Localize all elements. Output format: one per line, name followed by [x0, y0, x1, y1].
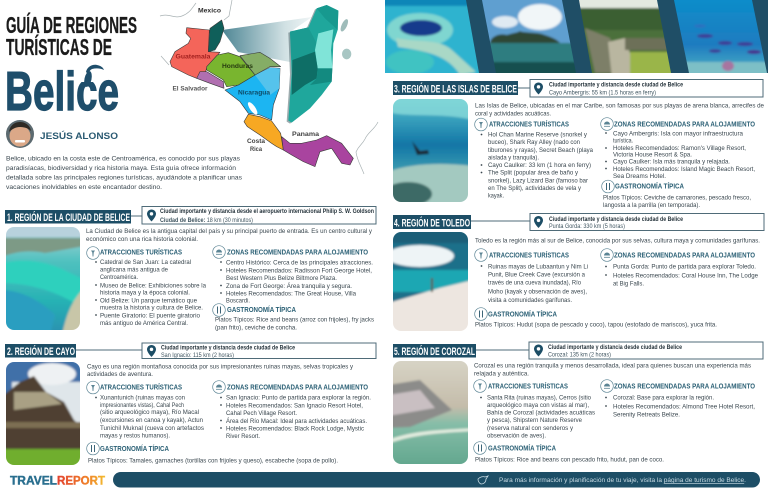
lodging: ZONAS RECOMENDADAS PARA ALOJAMIENTO: [227, 382, 368, 392]
lodging: Hoteles Recomendados: Ramon's Village Resort,: [613, 145, 746, 152]
photo: reef aerial: [6, 227, 80, 330]
attractions: The Split (popular área de baño y: [488, 170, 579, 177]
lodging: at Big Falls.: [613, 281, 644, 288]
attractions: través de una cueva inundada), Río: [488, 280, 581, 287]
intro text: [6, 156, 243, 191]
attractions: kayak.: [488, 193, 504, 200]
attractions: [87, 247, 206, 327]
lodging: Serenity Retreats Belize.: [613, 412, 680, 419]
photo: Xunantunich ruins: [6, 362, 80, 465]
Belize detail map: [287, 5, 351, 124]
footer bar: [113, 472, 760, 488]
title: GUÍA DE REGIONES: [6, 11, 137, 38]
attractions: ATRACCIONES TURÍSTICAS: [100, 248, 182, 256]
panel: region 2: [0, 343, 376, 470]
gastronomy: Platos Típicos: Rice and beans con pescado frito, hudut, pan de coco.: [475, 456, 664, 463]
attractions: Catedral de San Juan: La catedral: [100, 259, 192, 266]
lodging: Cayo Caulker: Isla más tranquila y relajada.: [613, 159, 730, 166]
panel: region 1: [0, 206, 376, 335]
map labels: Honduras: [222, 63, 253, 70]
attractions: snorkel), Lazy Lizard Bar (famoso bar: [488, 177, 589, 184]
distance box: Corozal: 135 km (2 horas): [548, 352, 611, 358]
map labels: Rica: [250, 146, 262, 153]
photo: beach: [393, 232, 468, 331]
lodging: [601, 380, 755, 419]
photo banner: [385, 0, 768, 73]
attractions: buceo), Shark Ray Alley (nado con: [488, 139, 580, 146]
intro: relajada y auténtica.: [474, 371, 529, 378]
attractions: Hol Chan Marine Reserve (snorkel y: [488, 132, 588, 139]
map of Central America: [160, 0, 378, 174]
gastronomy: Platos Típicos: Rice and beans (arroz con frijoles), fry jacks: [215, 317, 375, 324]
distance box: Ciudad importante y distancia desde el aeropuerto internacional Philip S. W. Goldson: [160, 209, 374, 215]
author: JESÚS ALONSO: [40, 130, 118, 141]
section heading: 3. REGIÓN DE LAS ISLAS DE BELICE: [394, 82, 517, 96]
lodging: Boscardi.: [226, 298, 250, 305]
attractions: más antiguo de América Central.: [100, 320, 188, 327]
title: TURÍSTICAS DE: [6, 33, 112, 60]
intro: Corozal es una región tranquila y menos desarrollada, ideal para quienes buscan una experiencia más: [474, 363, 752, 370]
gastronomy: GASTRONOMÍA TÍPICA: [488, 310, 557, 318]
gastronomy: [87, 442, 338, 464]
photo: reef fish: [674, 0, 767, 73]
title: [6, 11, 137, 60]
panel: region 5: [388, 342, 763, 469]
section heading: [393, 215, 471, 230]
lodging: [213, 246, 373, 305]
attractions: Centroamérica.: [100, 274, 138, 281]
photo: Belize island: [482, 0, 576, 73]
attractions: en The Split), actividades de vela y: [488, 185, 582, 192]
gastronomy: GASTRONOMÍA TÍPICA: [100, 444, 169, 453]
gastronomy: Platos Típicos: Hudut (sopa de pescado y coco), tapou (estofado de mariscos), yuca frita.: [475, 322, 717, 329]
cone highlight: [222, 17, 312, 62]
distance box: Ciudad importante y distancia desde ciudad de Belice: [549, 217, 684, 223]
attractions: (reserva natural con senderos y: [487, 425, 574, 432]
lodging: Best Western Plus Belize Biltmore Plaza.: [226, 275, 337, 282]
attractions: Cayo Caulker: 33 km (1 hora en ferry): [488, 162, 591, 169]
intro: económico con una rica historia colonial.: [86, 236, 198, 243]
intro text: vacaciones inolvidables en este encantador destino.: [6, 184, 162, 191]
lodging: Hoteles Recomendados: San Ignacio Resort Hotel,: [226, 402, 363, 409]
gastronomy: langosta a la parrilla (en temporada).: [603, 202, 700, 209]
distance box: [530, 80, 763, 97]
section heading: [5, 344, 76, 358]
lodging: San Ignacio: Punto de partida para explorar la región.: [226, 395, 371, 402]
distance box: [530, 214, 764, 230]
lodging: Centro Histórico: Cerca de las principales atracciones.: [226, 260, 373, 267]
photo: snorkel diver: [393, 99, 468, 202]
lodging: [601, 118, 755, 180]
intro text: detallada sobre las principales regiones turísticas, ayudándote a planificar unas: [6, 174, 243, 182]
logo: Travel Report: TRAVEL: [10, 476, 57, 488]
gastronomy: GASTRONOMÍA TÍPICA: [615, 182, 684, 190]
gastronomy: [602, 180, 751, 209]
intro: coral y actividades acuáticas.: [475, 110, 551, 117]
distance box: Cayo Ambergris: 55 km (1.5 horas en ferry): [549, 90, 656, 96]
map labels: Panama: [292, 131, 319, 138]
gastronomy: Platos Típicos: Tamales, garnaches (tortillas con frijoles y queso), escabeche (sopa de pollo).: [88, 457, 338, 464]
author: [6, 120, 118, 148]
intro: [474, 363, 752, 378]
attractions: observación de aves).: [487, 432, 546, 439]
gastronomy: (pan frito), ceviche de concha.: [215, 325, 297, 332]
distance box: [529, 342, 763, 359]
map labels: [172, 8, 319, 153]
lodging: Zona de Fort George: Área tranquila y segura.: [226, 281, 352, 290]
icon: pointing hand: [478, 476, 488, 484]
attractions: visita a comunidades garífunas.: [488, 297, 572, 304]
lodging: Hoteles Recomendados: The Great House, Villa: [226, 290, 356, 297]
attractions: Punit, Blue Creek Cave (excursión a: [488, 272, 585, 279]
intro: actividades de aventura.: [87, 371, 153, 378]
lodging: Área del Río Macal: Ideal para actividades acuáticas.: [226, 416, 367, 425]
attractions: (sitio arqueológico maya), Río Macal: [100, 409, 200, 416]
distance box: [142, 206, 376, 224]
lodging: Hoteles Recomendados: Almond Tree Hotel Resort,: [613, 403, 755, 410]
distance box: Ciudad de Belice: 18 km (30 minutos): [160, 218, 253, 224]
attractions: y pesca), Shipstern Nature Reserve: [487, 417, 582, 424]
lodging: Hoteles Recomendados: Black Rock Lodge, Mystic: [226, 425, 365, 432]
intro text: paradisíacas, biodiversidad y rica historia maya. Esta guía ofrece información: [6, 165, 236, 172]
attractions: ATRACCIONES TURÍSTICAS: [489, 120, 569, 128]
attractions: [475, 249, 588, 304]
attractions: anglicana más antigua de: [100, 266, 168, 274]
gastronomy: GASTRONOMÍA TÍPICA: [227, 305, 296, 314]
attractions: (excursiones en canoa y kayak), Actun: [100, 417, 203, 424]
attractions: muestra la historia y cultura de Belice.: [100, 305, 203, 312]
attractions: tiburones y rayas), Secret Beach (playa: [488, 147, 593, 154]
gastronomy: [474, 442, 664, 463]
distance box: [142, 343, 376, 359]
attractions: Santa Rita (ruinas mayas), Cerros (sitio: [487, 395, 591, 402]
logo: Travel Report: REPORT: [57, 476, 105, 488]
lodging: River Resort.: [226, 433, 260, 440]
lodging: [213, 381, 371, 440]
intro: Cayo es una región montañosa conocida por sus impresionantes ruinas mayas, selvas tropicales y: [87, 364, 354, 370]
attractions: impresionantes vistas), Cahal Pech: [100, 402, 184, 409]
section heading: 5. REGIÓN DE COROZAL: [394, 345, 475, 358]
logo: Belice with toucan: Belice: [5, 60, 119, 122]
section heading: [5, 210, 131, 224]
gastronomy: GASTRONOMÍA TÍPICA: [488, 444, 556, 452]
attractions: arqueológico maya con vistas al mar),: [487, 402, 589, 409]
lodging: Hoteles Recomendados: Island Magic Beach Resort,: [613, 166, 755, 173]
attractions: Tunichil Muknal (cueva con artefactos: [100, 425, 205, 432]
distance box: Ciudad importante y distancia desde ciudad de Belice: [549, 82, 684, 88]
lodging: Punta Gorda: Punto de partida para explorar Toledo.: [613, 264, 756, 271]
attractions: Bahía de Corozal (actividades acuáticas: [487, 409, 596, 416]
intro: [87, 364, 354, 378]
distance box: Punta Gorda: 330 km (5 horas): [549, 224, 625, 230]
attractions: ATRACCIONES TURÍSTICAS: [489, 250, 569, 260]
author photo: [6, 120, 34, 148]
map labels: Mexico: [198, 8, 221, 14]
attractions: historia maya y la época colonial.: [100, 290, 190, 297]
map labels: El Salvador: [172, 86, 208, 93]
section heading: [393, 81, 518, 96]
intro: [475, 102, 764, 117]
panel: region 3: [384, 80, 764, 209]
distance box: Ciudad importante y distancia desde ciudad de Belice: [548, 345, 683, 351]
map labels: Guatemala: [176, 54, 211, 61]
attractions: ATRACCIONES TURÍSTICAS: [100, 382, 182, 392]
photo: Maya ruins: [579, 0, 671, 73]
gastronomy: [475, 308, 717, 329]
logo: Travel Report: [10, 476, 105, 488]
attractions: Moho (kayak y observación de aves),: [488, 288, 587, 295]
lodging: Hoteles Recomendados: Coral House Inn, The Lodge: [613, 272, 758, 279]
photo: Blue Hole: [385, 0, 479, 73]
attractions: Museo de Belice: Exhibiciones sobre la: [100, 282, 206, 289]
map labels: Costa: [247, 138, 265, 145]
lodging: Victoria House Resort & Spa.: [613, 152, 692, 159]
photo: Corozal coast: [393, 361, 468, 464]
distance box: San Ignacio: 115 km (2 horas): [161, 353, 234, 359]
section heading: 2. REGIÓN DE CAYO: [7, 345, 75, 358]
lodging: turística.: [613, 138, 633, 145]
lodging: [601, 249, 758, 288]
section heading: 1. REGIÓN DE LA CIUDAD DE BELICE: [7, 211, 130, 224]
section heading: 4. REGIÓN DE TOLEDO: [394, 216, 470, 230]
attractions: [474, 380, 596, 439]
lodging: Corozal: Base para explorar la región.: [613, 395, 714, 402]
panel: region 4: [386, 214, 764, 336]
attractions: Xunantunich (ruinas mayas con: [100, 395, 185, 402]
lodging: Cayo Ambergris: Isla con mayor infraestructura: [613, 130, 743, 137]
section heading: [393, 344, 476, 358]
lodging: Hoteles Recomendados: Radisson Fort George Hotel,: [226, 267, 372, 274]
gastronomy: [213, 304, 375, 332]
lodging: Sea Dreams Hotel.: [613, 173, 666, 180]
attractions: Ruinas mayas de Lubaantun y Nim Li: [488, 263, 588, 270]
map labels: Nicaragua: [238, 90, 270, 96]
attractions: aislada y tranquila).: [488, 155, 539, 162]
attractions: mayas y restos humanos).: [100, 432, 170, 440]
intro text: Belice, ubicado en la costa este de Centroamérica, es conocido por sus playas: [6, 156, 241, 162]
distance box: Ciudad importante y distancia desde ciudad de Belice: [161, 346, 296, 352]
lodging: ZONAS RECOMENDADAS PARA ALOJAMIENTO: [227, 248, 368, 256]
attractions: [87, 381, 205, 440]
lodging: Cahal Pech Village Resort.: [226, 410, 297, 417]
attractions: ATRACCIONES TURÍSTICAS: [488, 382, 568, 390]
intro: La Ciudad de Belice es la antigua capital del país y su principal puerto de entrada. Es un centro cultural y: [86, 228, 373, 235]
footer bar: Para más información y planificación de tu viaje, visita la página de turismo de Belice.: [499, 477, 746, 484]
attractions: Puente Giratorio: El puente giratorio: [100, 312, 200, 319]
intro: [86, 228, 373, 243]
attractions: [475, 118, 593, 200]
gastronomy: Platos Típicos: Ceviche de camarones, pescado fresco,: [603, 194, 751, 201]
attractions: Old Belize: Un parque temático que: [100, 297, 197, 304]
